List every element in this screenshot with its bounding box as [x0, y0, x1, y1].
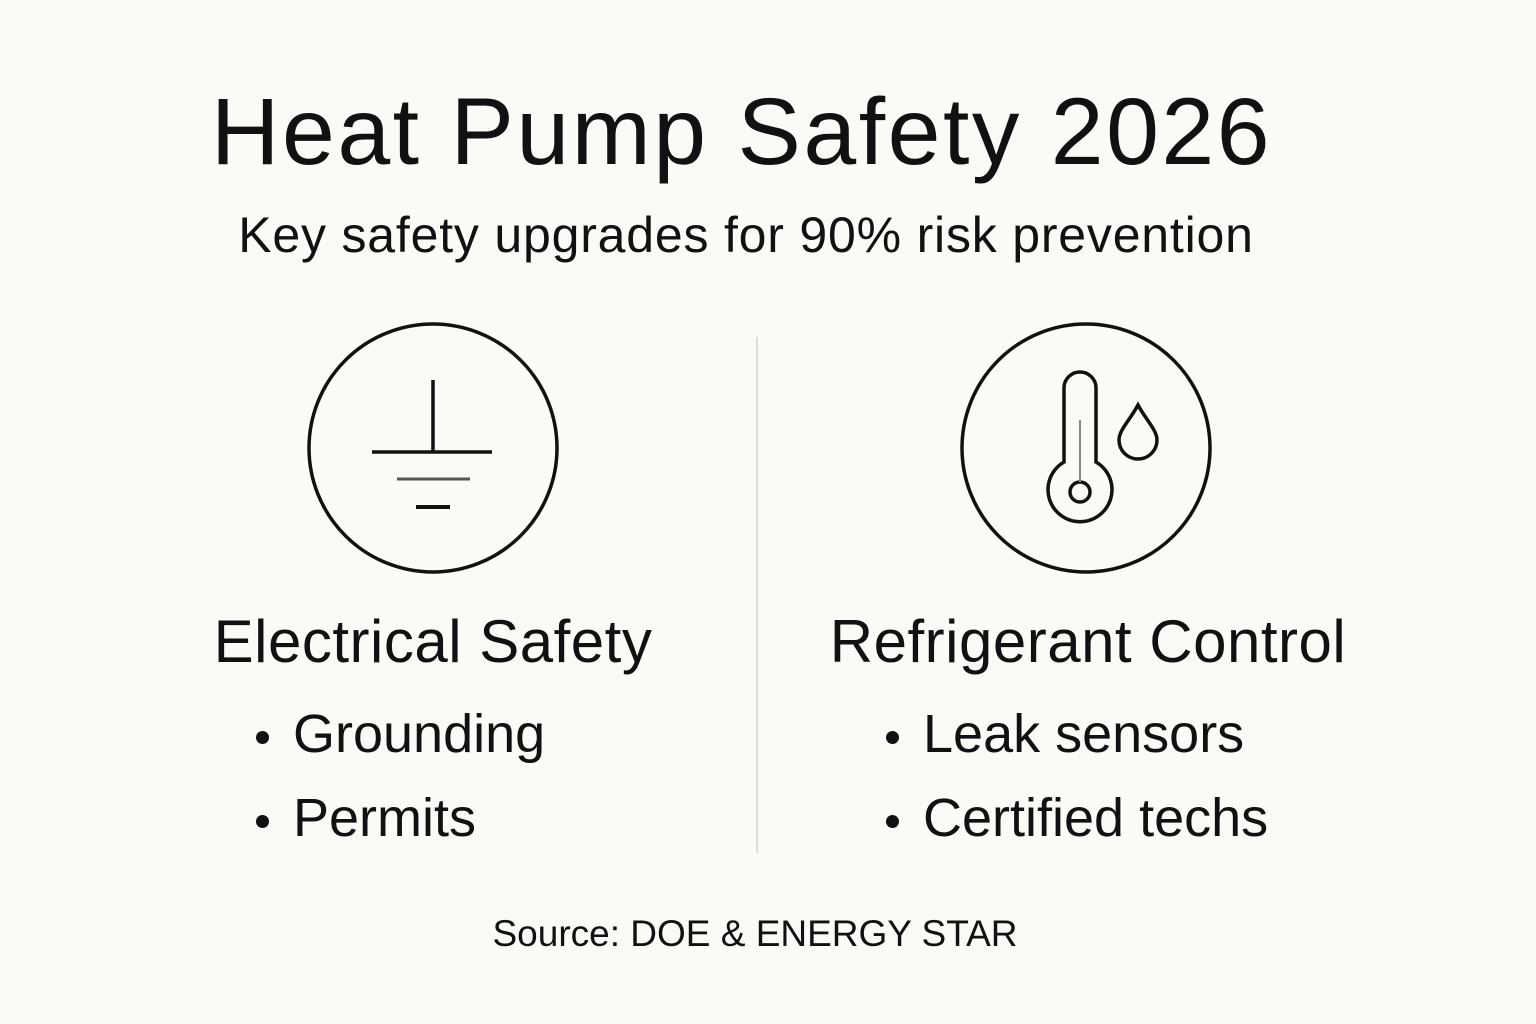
divider	[756, 337, 758, 853]
icon: ground symbol	[307, 322, 559, 574]
list: electrical	[256, 704, 545, 848]
list: refrigerant: Leak sensors	[923, 704, 1244, 764]
heading: Electrical Safety: Electrical Safety	[214, 608, 652, 675]
icon: thermometer and drop	[960, 322, 1212, 574]
subtitle: Key safety upgrades for 90% risk prevention	[238, 207, 1254, 263]
list: electrical: Grounding	[293, 704, 545, 764]
list: electrical: Permits	[293, 788, 476, 848]
heading: Refrigerant Control: Refrigerant Control	[830, 608, 1346, 675]
list: refrigerant	[886, 704, 1268, 848]
title: Heat Pump Safety 2026	[211, 79, 1272, 185]
source: Source: DOE & ENERGY STAR	[492, 913, 1018, 954]
list: refrigerant: Certified techs	[923, 788, 1268, 848]
